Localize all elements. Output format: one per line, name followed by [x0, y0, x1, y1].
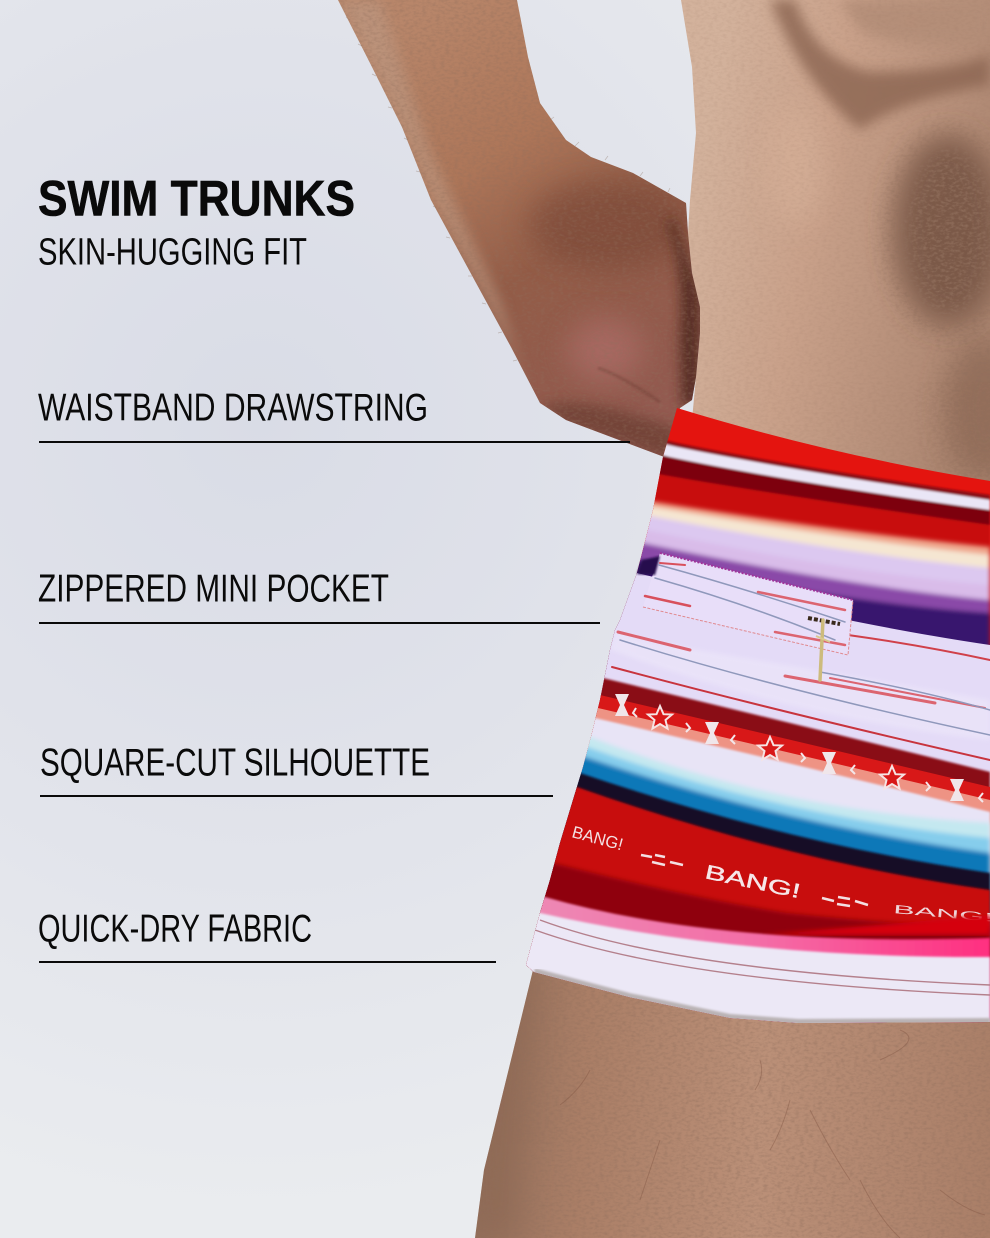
lower stripes — [526, 862, 990, 1023]
title: SWIM TRUNKS — [38, 170, 355, 226]
callout: zippered mini pocket: ZIPPERED MINI POCKET — [38, 568, 389, 610]
hem with stitching — [534, 920, 990, 1023]
blue and navy stripes — [526, 736, 990, 1023]
BANG! repeat text: BANG! — [570, 823, 625, 854]
photo: leg — [470, 960, 990, 1238]
waistband and upper stripes — [548, 440, 990, 887]
pinstripes — [612, 632, 990, 760]
callout: waistband drawstring: WAISTBAND DRAWSTRING — [38, 386, 428, 430]
zipper pull — [808, 618, 840, 680]
zippered pocket — [637, 553, 853, 680]
lavender centre panel — [593, 573, 990, 787]
BANG! repeat text — [570, 823, 990, 925]
BANG! repeat text: BANG! — [893, 902, 990, 925]
BANG! repeat text: BANG! — [703, 861, 802, 903]
photo: arm and hand — [330, 0, 705, 470]
red BANG stripe — [526, 786, 990, 1023]
photo: patterned trunks — [526, 408, 990, 1023]
photo: torso — [680, 0, 990, 500]
star stripe — [526, 676, 990, 971]
callout: quick-dry fabric: QUICK-DRY FABRIC — [38, 908, 312, 950]
subtitle: SKIN-HUGGING FIT — [38, 232, 307, 274]
callout: square-cut silhouette: SQUARE-CUT SILHOUETTE — [40, 742, 430, 784]
